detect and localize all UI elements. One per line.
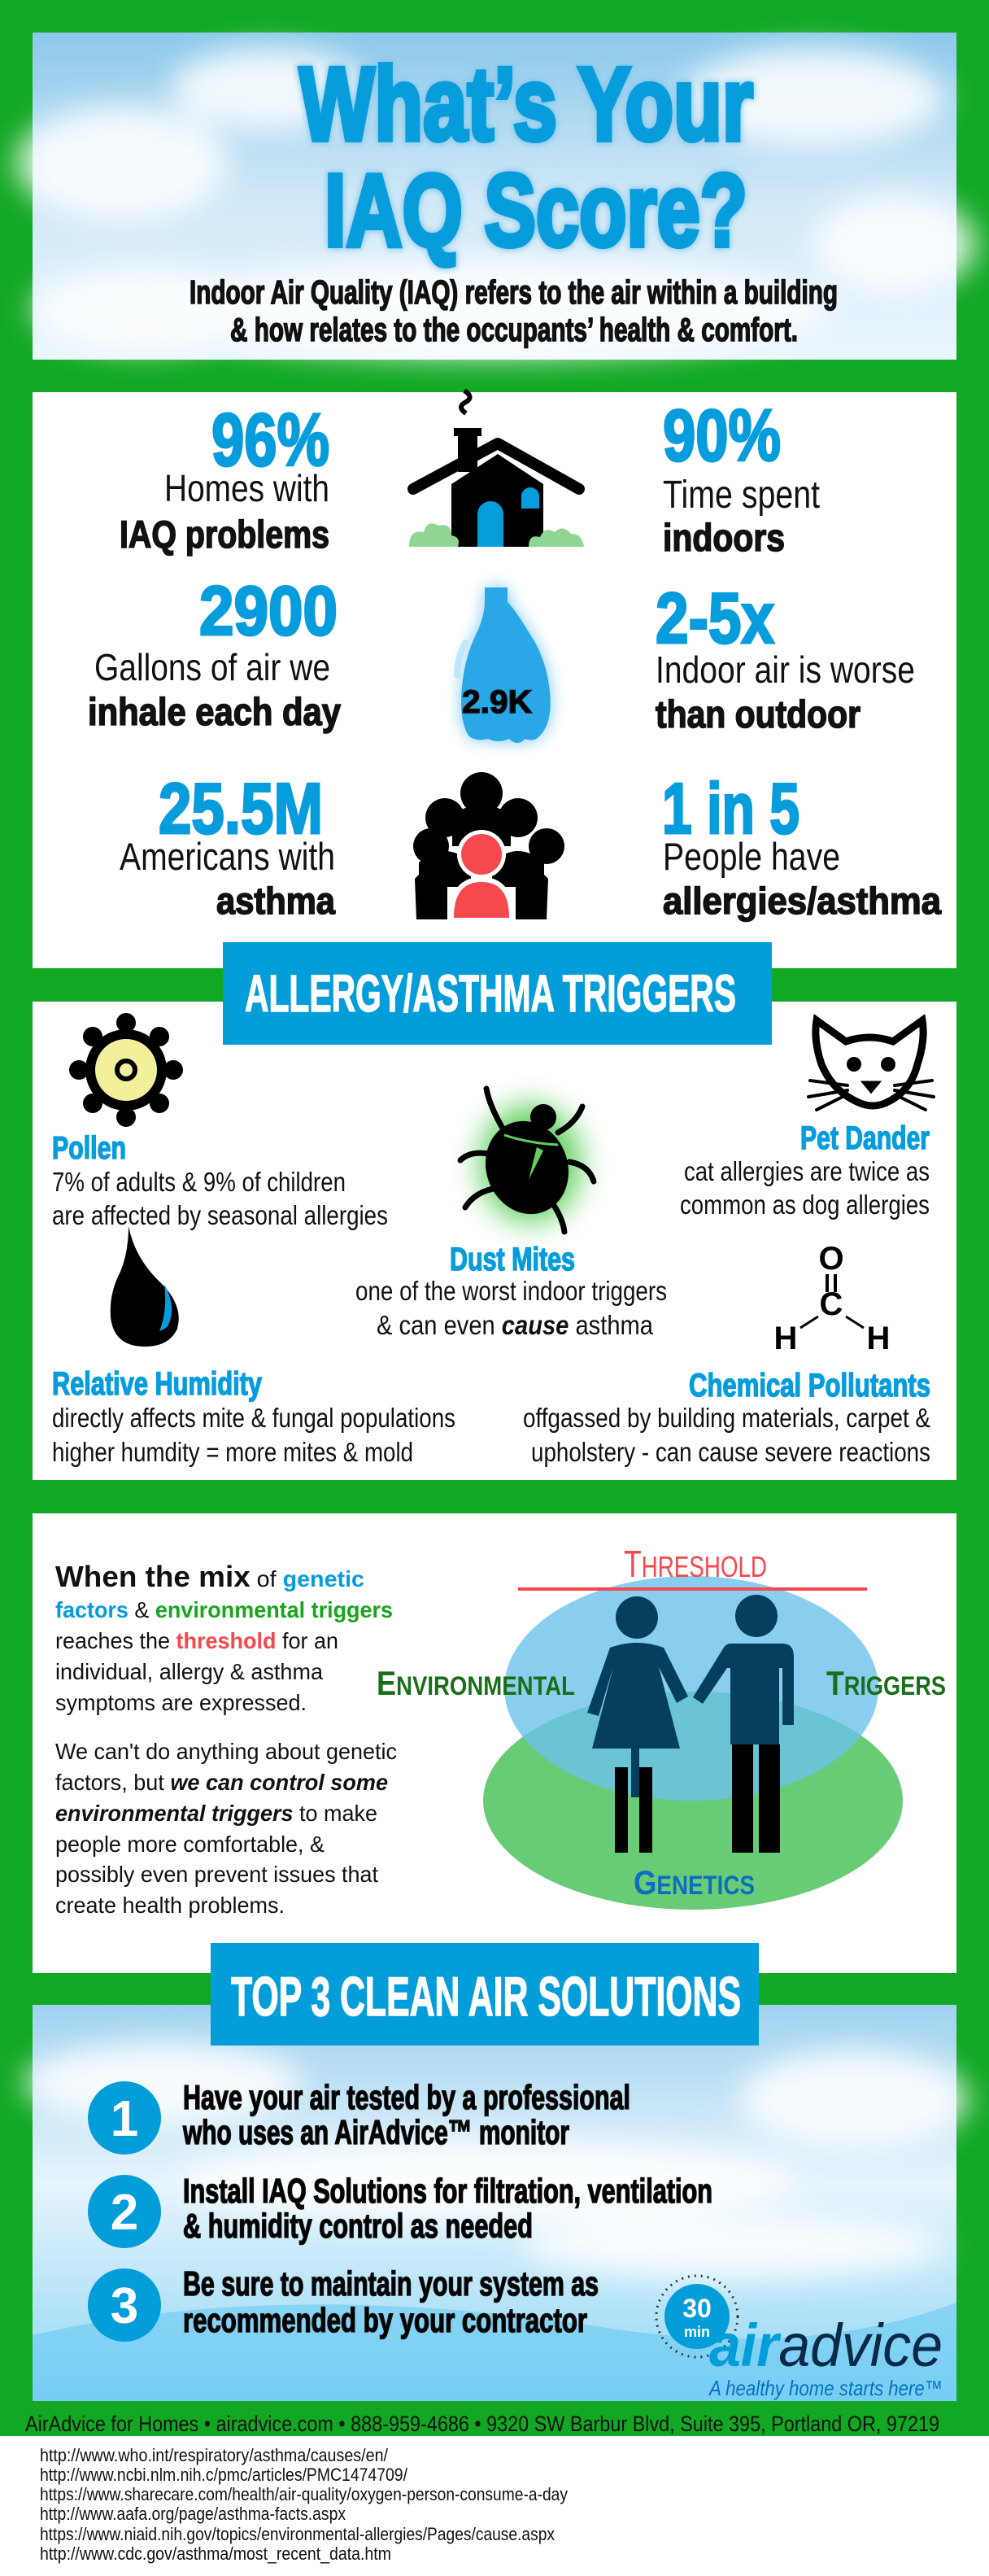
diagram: threshold venn: GENETICS xyxy=(634,1863,755,1901)
stat: 96%: IAQ problems xyxy=(120,513,329,556)
item 2: 2 xyxy=(111,2185,138,2241)
stat: 2-5x: Indoor air is worse xyxy=(656,648,915,691)
text: pollen: 7% of adults & 9% of children xyxy=(52,1167,346,1197)
subtitle xyxy=(190,273,838,348)
stat: 2-5x: 2-5x xyxy=(656,578,774,658)
sources list: http://www.aafa.org/page/asthma-facts.aspx xyxy=(40,2504,346,2524)
panel: header xyxy=(16,33,976,360)
item 3: 3 xyxy=(111,2278,138,2334)
text block: threshold explanation: symptoms are expressed. xyxy=(55,1690,307,1715)
stat: 90% xyxy=(663,395,820,559)
diagram: threshold venn: TRIGGERS xyxy=(826,1664,946,1702)
text block: threshold explanation: people more comfortable, & xyxy=(55,1832,325,1857)
text block: threshold explanation: environmental triggers to make xyxy=(55,1801,377,1826)
icon: formaldehyde: H xyxy=(867,1321,890,1356)
item 3: recommended by your contractor xyxy=(183,2301,587,2339)
text: relative humidity: higher humdity = more mites & mold xyxy=(52,1437,413,1467)
title: What’s Your xyxy=(299,46,753,163)
sources list: https://www.niaid.nih.gov/topics/environmental-allergies/Pages/cause.aspx xyxy=(40,2524,555,2544)
text: chemical pollutants xyxy=(523,1368,930,1467)
stat: 1 in 5: People have xyxy=(663,835,840,878)
stat: 25.5M: asthma xyxy=(216,880,335,922)
stat: 1 in 5: allergies/asthma xyxy=(663,880,941,922)
text: relative humidity: directly affects mite & fungal populations xyxy=(52,1403,455,1433)
diagram: threshold venn: ENVIRONMENTAL xyxy=(377,1664,575,1702)
text block: threshold explanation: reaches the threshold for an xyxy=(55,1628,338,1653)
sources list: http://www.who.int/respiratory/asthma/causes/en/ xyxy=(40,2445,389,2465)
text: pet dander: Pet Dander xyxy=(800,1120,930,1156)
item 1 xyxy=(88,2078,630,2155)
text block: threshold explanation: When the mix of genetic xyxy=(55,1560,364,1593)
stat: 2900: Gallons of air we xyxy=(94,646,330,688)
stat: 2-5x xyxy=(656,578,915,736)
stat: 90%: indoors xyxy=(663,516,785,559)
stat: 2900: 2900 xyxy=(199,573,338,650)
item 3 xyxy=(88,2264,599,2342)
item 1: 1 xyxy=(111,2091,138,2147)
icon: formaldehyde: O xyxy=(818,1241,844,1277)
icon: water drop xyxy=(111,1226,179,1347)
text block: threshold explanation: possibly even prevent issues that xyxy=(55,1862,378,1887)
text: dust mites: & can even cause asthma xyxy=(377,1310,654,1340)
icon: jug xyxy=(457,587,551,743)
icon: formaldehyde: H xyxy=(774,1321,797,1356)
text: relative humidity xyxy=(52,1366,455,1467)
icon: house xyxy=(409,391,584,547)
title: IAQ Score? xyxy=(325,153,747,268)
text block: threshold explanation: create health problems. xyxy=(55,1893,285,1918)
icon: couple xyxy=(587,1595,794,1853)
stat: 96%: Homes with xyxy=(164,467,329,509)
sources list xyxy=(40,2445,568,2564)
text: relative humidity: Relative Humidity xyxy=(52,1366,263,1402)
title: IAQ Score? xyxy=(325,153,747,268)
stat: 2-5x: than outdoor xyxy=(656,692,860,736)
sources list: http://www.ncbi.nlm.nih.c/pmc/articles/PMC1474709/ xyxy=(40,2465,408,2485)
diagram: threshold venn: THRESHOLD xyxy=(624,1543,767,1585)
panel: solutions xyxy=(24,2005,968,2401)
title xyxy=(299,46,753,268)
item 1: who uses an AirAdvice™ monitor xyxy=(182,2113,569,2151)
item 2 xyxy=(88,2172,712,2248)
panel: stats xyxy=(33,391,956,968)
logo: airadvice: airadvice xyxy=(709,2312,943,2379)
icon: people xyxy=(413,772,564,919)
logo: airadvice: min xyxy=(684,2324,710,2340)
text block: threshold explanation: individual, allergy & asthma xyxy=(55,1659,323,1684)
logo: airadvice: A healthy home starts here™ xyxy=(708,2376,943,2400)
text: pet dander: cat allergies are twice as xyxy=(684,1156,930,1186)
icon: dust mite xyxy=(460,1089,594,1232)
text: pollen: Pollen xyxy=(52,1131,126,1166)
panel: triggers xyxy=(33,1002,956,1480)
text: pet dander xyxy=(680,1120,930,1220)
item 2: & humidity control as needed xyxy=(183,2207,533,2245)
stat: 96% xyxy=(120,399,329,556)
heading: allergy/asthma triggers xyxy=(223,942,772,1045)
item 3: Be sure to maintain your system as xyxy=(183,2264,599,2303)
text: dust mites: one of the worst indoor triggers xyxy=(355,1276,667,1306)
icon: cat xyxy=(808,1020,934,1110)
text block: threshold explanation: factors & environmental triggers xyxy=(55,1597,393,1622)
stat: 25.5M: Americans with xyxy=(120,835,335,878)
item 2: Install IAQ Solutions for filtration, ventilation xyxy=(183,2172,712,2210)
icon: formaldehyde: C xyxy=(820,1286,843,1322)
icon: formaldehyde xyxy=(774,1241,890,1356)
stat: 96%: 96% xyxy=(211,399,329,482)
stat: 90%: 90% xyxy=(663,395,781,477)
text: dust mites xyxy=(355,1242,667,1340)
diagram: threshold venn xyxy=(377,1543,946,1910)
icon: jug: 2.9K xyxy=(462,684,532,720)
panel: genetics threshold xyxy=(33,1513,956,1973)
icon: pollen xyxy=(69,1013,183,1127)
logo: airadvice xyxy=(656,2276,943,2400)
logo: airadvice: 30 xyxy=(682,2294,712,2323)
heading: top 3 clean air solutions xyxy=(211,1943,759,2046)
text: pollen: are affected by seasonal allergies xyxy=(52,1200,388,1230)
stat: 2900 xyxy=(88,573,341,733)
text block: threshold explanation: factors, but we can control some xyxy=(55,1770,388,1795)
stat: 1 in 5 xyxy=(662,768,941,922)
text block: threshold explanation: We can't do anything about genetic xyxy=(55,1739,397,1764)
sources list: https://www.sharecare.com/health/air-quality/oxygen-person-consume-a-day xyxy=(40,2484,568,2504)
text block: threshold explanation xyxy=(55,1560,397,1918)
stat: 25.5M: 25.5M xyxy=(159,768,323,849)
title: What’s Your xyxy=(299,46,753,163)
text: pollen xyxy=(52,1131,388,1230)
sources list: http://www.cdc.gov/asthma/most_recent_data.htm xyxy=(40,2543,391,2564)
stat: 90%: Time spent xyxy=(663,474,820,517)
stat: 1 in 5: 1 in 5 xyxy=(662,768,799,849)
stat: 25.5M xyxy=(120,768,335,922)
stat: 2900: inhale each day xyxy=(88,690,341,733)
item 1: Have your air tested by a professional xyxy=(183,2078,630,2116)
text: pet dander: common as dog allergies xyxy=(680,1190,930,1220)
text: dust mites: Dust Mites xyxy=(450,1242,575,1277)
